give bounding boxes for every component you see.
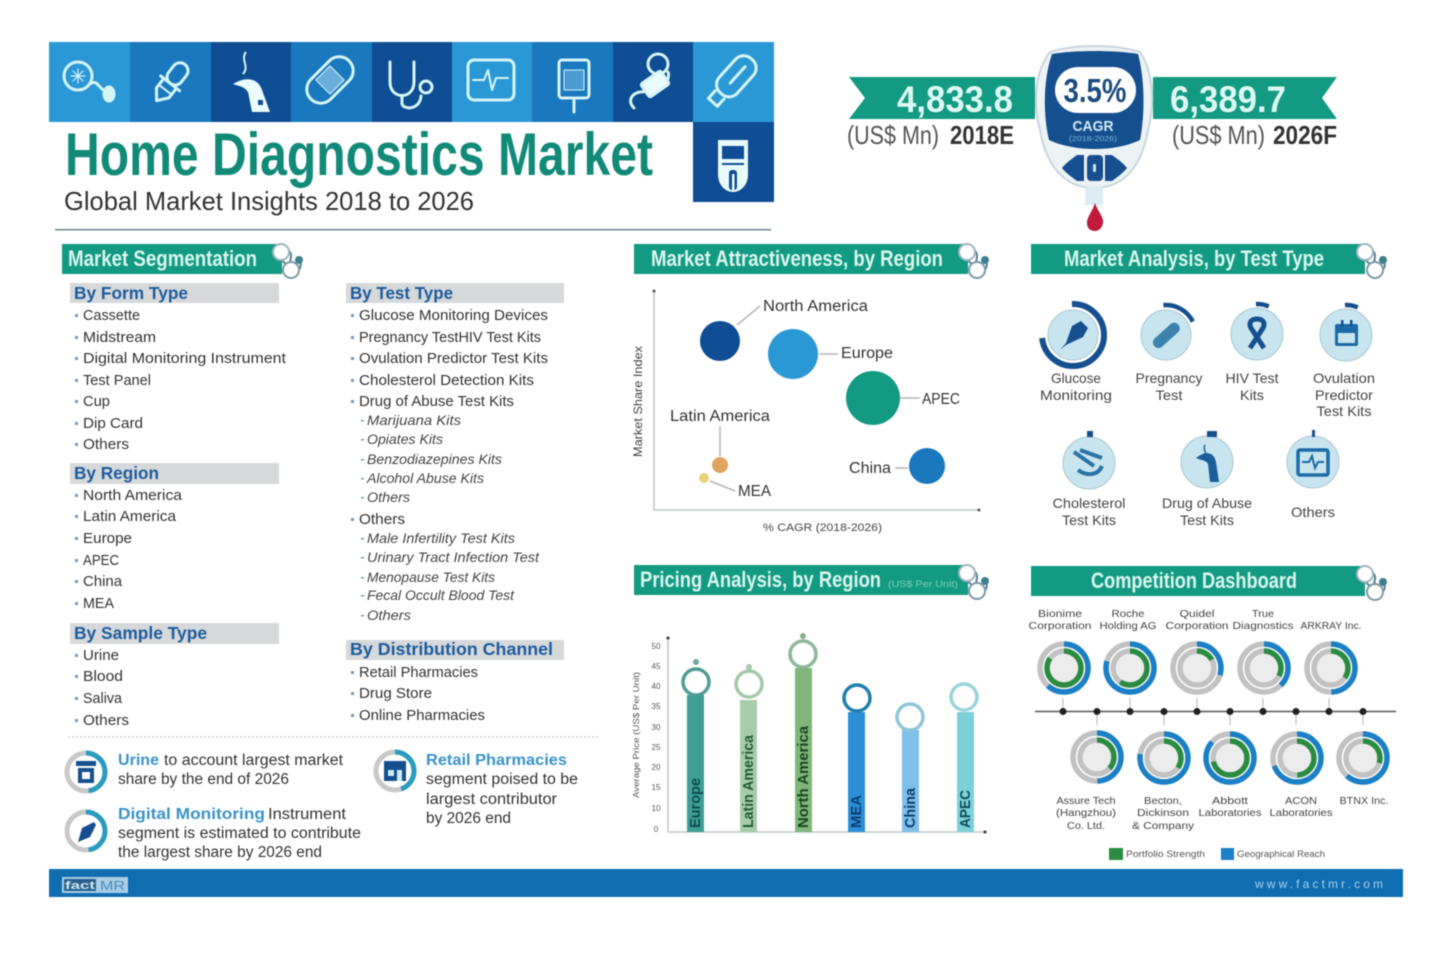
bubble chart: Europe — [841, 345, 893, 362]
donut: Becton — [1140, 734, 1188, 782]
ribbon: 2026 value — [1153, 77, 1337, 150]
list: by distribution channel: Drug Store — [359, 686, 432, 702]
bar chart: 0 — [654, 825, 659, 834]
bar: China — [897, 704, 923, 832]
list: by test type: Pregnancy TestHIV Test Kits — [359, 330, 541, 346]
icon: stethoscope dial — [64, 62, 114, 101]
donut: Assure Tech — [1073, 733, 1121, 781]
bar chart: 35 — [652, 702, 661, 711]
list: by test type: Alcohol Abuse Kits — [366, 470, 484, 486]
icon: store — [376, 752, 414, 790]
item: hiv test kits: Kits — [1240, 387, 1264, 403]
list: by distribution channel: Retail Pharmacies — [359, 665, 478, 681]
ribbon: 2026 value: 6,389.7 — [1170, 79, 1286, 120]
callout: urine: to account largest market — [164, 752, 344, 769]
list: by form type: Midstream — [83, 330, 156, 346]
list: by test type: Others — [367, 489, 410, 505]
icon: iv bag — [559, 60, 589, 112]
ribbon: 2018 value: 2018E — [950, 120, 1014, 150]
item: pregnancy test: Test — [1156, 387, 1183, 403]
heading: market segmentation: Market Segmentation — [68, 246, 257, 271]
bar chart: 25 — [652, 743, 661, 752]
list: by region: Europe — [83, 531, 132, 547]
bubble chart: China — [849, 460, 891, 477]
list: by region: China — [83, 574, 123, 590]
top company labels — [1028, 608, 1362, 632]
subtitle: Global Market Insights 2018 to 2026 — [64, 186, 474, 216]
list: by test type: By Test Type — [350, 283, 453, 303]
donut: ACON — [1273, 734, 1321, 782]
list: by form type: Test Panel — [83, 373, 151, 389]
list: by test type: Marijuana Kits — [367, 412, 461, 428]
bar: MEA: MEA — [848, 795, 865, 828]
donut: BTNX — [1339, 734, 1387, 782]
item: ovulation predictor: Ovulation — [1313, 370, 1375, 386]
glucose meter with CAGR: CAGR — [1072, 118, 1114, 135]
list: by form type: Digital Monitoring Instrument — [83, 351, 286, 367]
heading: market attractiveness: Market Attractiveness, by Region — [651, 246, 943, 271]
item: ovulation predictor — [1313, 304, 1377, 419]
list: by test type: Menopause Test Kits — [367, 569, 495, 585]
item: hiv test kits — [1226, 303, 1288, 403]
heading: pricing analysis — [634, 565, 989, 599]
icon: monitor — [468, 60, 514, 100]
bubble chart: APEC — [922, 391, 960, 408]
list: by sample type: Others — [83, 713, 129, 729]
callout: retail pharmacies: segment poised to be — [426, 771, 578, 788]
list: by region — [70, 463, 279, 612]
list: by sample type — [70, 623, 279, 729]
bottom company labels: Co. Ltd. — [1067, 820, 1105, 832]
bubble chart: North America — [763, 298, 868, 315]
list: by test type: Ovulation Predictor Test Kits — [359, 351, 548, 367]
heading: market analysis — [1031, 244, 1387, 278]
bottom company labels: ACON — [1285, 795, 1317, 807]
callout: retail pharmacies — [376, 752, 578, 827]
item: glucose monitoring: Monitoring — [1040, 387, 1112, 403]
bubble chart: Market Share Index — [631, 346, 645, 457]
list: by test type: Others — [359, 512, 405, 528]
panel: market analysis by test type — [1031, 244, 1387, 528]
heading: market analysis: Market Analysis, by Test Type — [1064, 246, 1324, 271]
top company labels: Corporation — [1166, 620, 1229, 632]
list: by test type — [346, 283, 564, 623]
glucose meter with CAGR: 3.5% — [1064, 72, 1126, 109]
item: cholesterol: Test Kits — [1062, 512, 1116, 528]
item: drug of abuse — [1162, 431, 1252, 528]
bar chart: 30 — [652, 723, 661, 732]
bar chart: 15 — [652, 783, 661, 792]
panel: competition dashboard — [1028, 566, 1396, 860]
bar chart — [631, 633, 986, 834]
list: by test type: Opiates Kits — [367, 431, 443, 447]
bar: APEC: APEC — [957, 790, 974, 828]
list: by test type: Glucose Monitoring Devices — [359, 308, 548, 324]
list: by test type: Fecal Occult Blood Test — [367, 587, 515, 603]
list: by sample type: Saliva — [83, 691, 123, 707]
footer logo: MR — [100, 878, 125, 893]
bar chart: 20 — [652, 763, 661, 772]
icon: bandage — [301, 51, 359, 109]
item: others: Others — [1291, 504, 1335, 520]
item: others — [1287, 430, 1339, 520]
bottom company labels: Laboratories — [1198, 807, 1262, 819]
icon: blood drop — [1087, 203, 1103, 231]
item: pregnancy test — [1133, 302, 1202, 403]
bar: APEC — [951, 684, 977, 832]
list: by form type — [70, 283, 286, 453]
icon: pipette — [147, 57, 194, 108]
list: by test type: Drug of Abuse Test Kits — [359, 394, 514, 410]
icon: stethoscope — [390, 62, 432, 108]
list: by region: APEC — [83, 553, 119, 569]
footer logo — [62, 877, 128, 893]
list: by form type: Cup — [83, 394, 110, 410]
icon: urine cup — [67, 753, 105, 791]
glucose meter with CAGR — [1036, 46, 1152, 231]
list: by form type: By Form Type — [74, 283, 188, 303]
bar: North America: North America — [795, 725, 812, 828]
list: by sample type: Urine — [83, 648, 119, 664]
heading: pricing analysis: (US$ Per Unit) — [888, 579, 958, 589]
bar: Latin America — [736, 664, 762, 832]
footer logo: fact — [65, 880, 96, 892]
icon: cuff — [631, 54, 669, 108]
bar: Latin America: Latin America — [740, 734, 757, 828]
list: by test type: Urinary Tract Infection Test — [367, 549, 540, 565]
callout: digital monitoring: Instrument — [268, 806, 347, 823]
item: drug of abuse: Drug of Abuse — [1162, 495, 1252, 511]
item: glucose monitoring: Glucose — [1051, 370, 1101, 386]
top company labels: Corporation — [1028, 620, 1092, 632]
item: ovulation predictor: Predictor — [1315, 387, 1373, 403]
heading: pricing analysis: Pricing Analysis, by Region — [640, 567, 881, 592]
top company labels: ARKRAY Inc. — [1300, 620, 1362, 632]
list: by distribution channel: Online Pharmacies — [359, 708, 485, 724]
item: pregnancy test: Pregnancy — [1136, 370, 1202, 386]
list: by region: MEA — [83, 596, 114, 612]
item: hiv test kits: HIV Test — [1226, 370, 1279, 386]
list: by test type: Cholesterol Detection Kits — [359, 373, 534, 389]
bubble chart: Latin America — [670, 408, 770, 425]
callout: retail pharmacies: by 2026 end — [426, 810, 511, 827]
list: by distribution channel — [346, 639, 564, 724]
panel: market segmentation — [62, 244, 564, 729]
ribbon: 2026 value: (US$ Mn) — [1172, 120, 1265, 150]
list: by form type: Dip Card — [83, 416, 143, 432]
list: by region: Latin America — [83, 509, 177, 525]
icon: thermometer — [704, 51, 761, 110]
bottom company labels: Laboratories — [1270, 807, 1332, 819]
callout: urine: Urine — [118, 752, 159, 769]
bar chart: 50 — [652, 642, 661, 651]
bottom company labels: Dickinson — [1137, 807, 1189, 819]
top company labels: Quidel — [1180, 608, 1214, 620]
timeline — [1035, 698, 1396, 725]
donut: Abbott — [1206, 734, 1254, 782]
icon: urine stream — [233, 52, 270, 112]
top company labels: Diagnostics — [1232, 620, 1294, 632]
title: Home Diagnostics Market — [65, 121, 653, 188]
callout: digital monitoring: the largest share by 2026 end — [118, 844, 322, 861]
footer url: www.factmr.com — [1254, 877, 1383, 891]
bottom company labels: Abbott — [1212, 795, 1248, 807]
bottom company labels: Becton, — [1144, 795, 1182, 807]
bar chart: 45 — [652, 662, 661, 671]
ribbon: 2018 value: 4,833.8 — [897, 79, 1013, 120]
panel: pricing analysis — [631, 565, 989, 834]
top company labels: Bionime — [1038, 608, 1082, 620]
item: ovulation predictor: Test Kits — [1316, 403, 1372, 419]
callout: urine: share by the end of 2026 — [118, 771, 289, 788]
bottom company labels: (Hangzhou) — [1056, 807, 1116, 819]
bottom company labels: BTNX Inc. — [1340, 795, 1388, 807]
donut: ARKRAY — [1307, 644, 1355, 692]
legend: Geographical Reach — [1237, 849, 1325, 859]
donut: True Diagnostics — [1240, 644, 1288, 692]
donut: Roche — [1106, 644, 1154, 692]
callout: digital monitoring: segment is estimated to contribute — [118, 825, 361, 842]
bottom company labels: Assure Tech — [1056, 795, 1116, 807]
callout: digital monitoring: Digital Monitoring — [118, 806, 265, 823]
list: by distribution channel: By Distribution Channel — [350, 639, 553, 659]
heading: market segmentation — [62, 244, 303, 278]
list: by sample type: Blood — [83, 669, 123, 685]
item: cholesterol: Cholesterol — [1052, 495, 1126, 511]
heading: market attractiveness — [634, 244, 989, 278]
bar chart: 40 — [652, 682, 661, 691]
callout: digital monitoring — [67, 806, 361, 861]
bubble chart: % CAGR (2018-2026) — [763, 522, 882, 534]
glucose meter with CAGR: (2018-2026) — [1069, 136, 1117, 143]
donut: Bionime — [1040, 644, 1088, 692]
bubble chart — [631, 290, 980, 534]
item: glucose monitoring — [1040, 303, 1112, 403]
bar: Europe: Europe — [687, 778, 704, 828]
heading: competition dashboard — [1031, 566, 1387, 600]
panel: market attractiveness — [631, 244, 989, 534]
icon: glucose meter — [718, 140, 748, 192]
item: drug of abuse: Test Kits — [1180, 512, 1234, 528]
bar chart: 10 — [652, 804, 661, 813]
list: by region: North America — [83, 488, 183, 504]
list: by test type: Benzodiazepines Kits — [367, 451, 502, 467]
list: by test type: Male Infertility Test Kits — [367, 530, 515, 546]
bottom company labels: & Company — [1132, 820, 1195, 832]
ribbon: 2018 value: (US$ Mn) — [847, 120, 939, 150]
bottom company labels — [1056, 795, 1388, 832]
header icon band — [49, 42, 774, 202]
bar: North America — [790, 633, 816, 832]
ribbon: 2026 value: 2026F — [1273, 120, 1337, 150]
legend: Portfolio Strength — [1126, 849, 1205, 859]
top company labels: Holding AG — [1100, 620, 1156, 632]
ribbon: 2018 value — [847, 77, 1035, 150]
callout: urine — [67, 752, 344, 791]
bar: MEA — [844, 685, 870, 832]
icon: pen — [67, 812, 105, 850]
donut: Quidel — [1173, 644, 1221, 692]
list: by form type: Others — [83, 437, 129, 453]
bar: Europe — [683, 659, 709, 832]
list: by form type: Cassette — [83, 308, 140, 324]
callout: retail pharmacies: largest contributor — [426, 791, 557, 808]
legend — [1109, 848, 1325, 860]
bubble chart: MEA — [738, 483, 772, 500]
list: by test type: Others — [367, 607, 411, 623]
footer band — [49, 869, 1403, 897]
list: by sample type: By Sample Type — [74, 623, 207, 643]
top company labels: Roche — [1112, 608, 1145, 620]
item: cholesterol — [1052, 431, 1126, 528]
bar: China: China — [902, 787, 919, 828]
bar chart: Average Price (US$ Per Unit) — [631, 672, 641, 798]
list: by region: By Region — [74, 463, 159, 483]
top company labels: True — [1252, 608, 1274, 620]
heading: competition dashboard: Competition Dashboard — [1091, 568, 1297, 593]
callout: retail pharmacies: Retail Pharmacies — [426, 752, 567, 769]
